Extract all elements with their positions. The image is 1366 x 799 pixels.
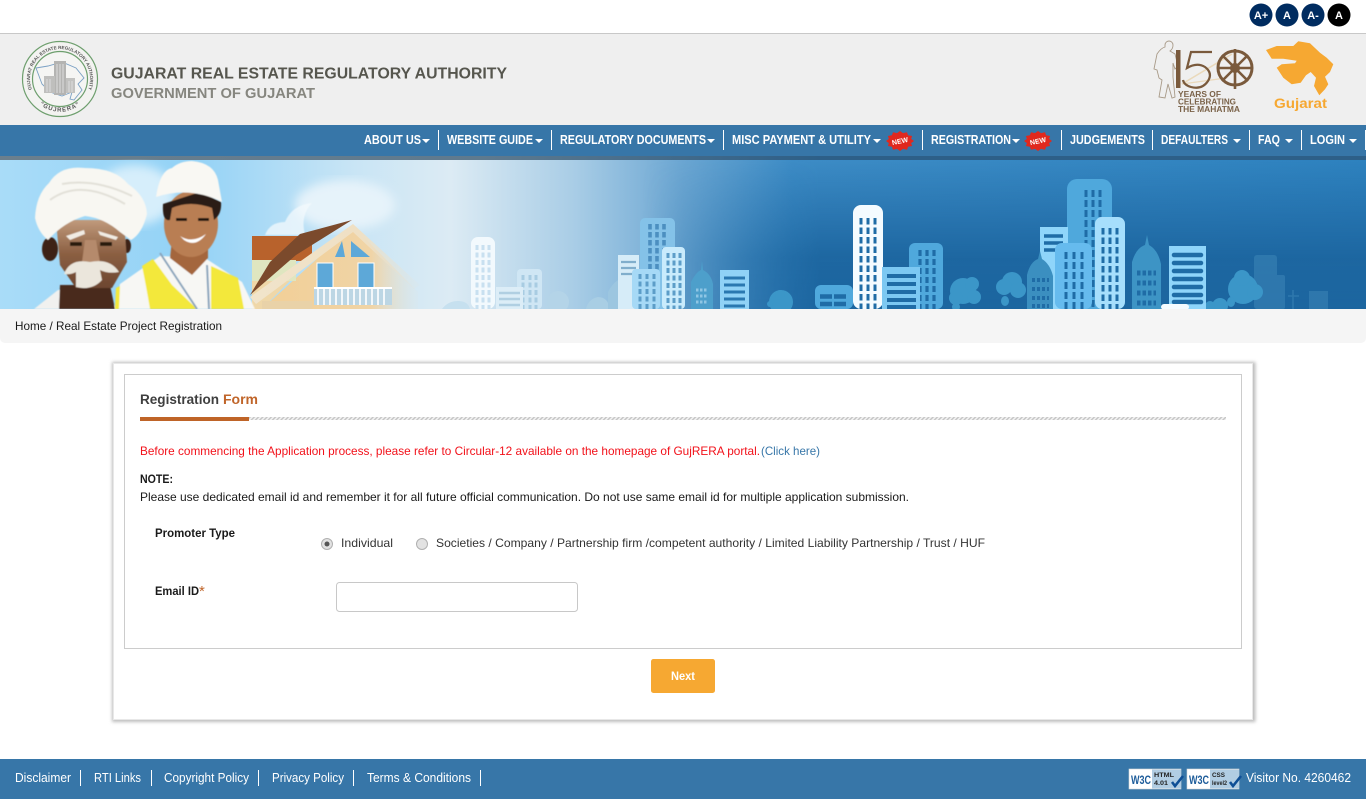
note text (140, 472, 909, 504)
font size controls: A (1283, 10, 1291, 22)
font size controls (1250, 4, 1350, 26)
heading: registration form: Registration (140, 392, 219, 407)
field: promoter type: Promoter Type (155, 526, 235, 540)
icon: GujRERA seal: "GUJRERA" (42, 102, 78, 112)
field: promoter type: Individual (341, 536, 393, 550)
navigation bar: DEFAULTERS (1161, 133, 1228, 147)
icon: W3C CSS badge (1187, 769, 1241, 789)
footer bar: RTI Links (94, 771, 141, 785)
footer bar: Terms & Conditions (367, 771, 471, 785)
notice text: Before commencing the Application process, please refer to Circular-12 available on the homepage of GujRERA portal. (140, 444, 760, 458)
note text: NOTE: (140, 472, 173, 486)
icon: pale skyline left (442, 218, 685, 313)
field: email id: * (199, 583, 205, 600)
title: authority name: GUJARAT REAL ESTATE REGULATORY AUTHORITY (111, 66, 507, 82)
icon: W3C HTML badge: HTML (1154, 772, 1174, 779)
title: authority name: GOVERNMENT OF GUJARAT (111, 86, 315, 102)
font size controls: A (1335, 10, 1343, 22)
navigation bar: MISC PAYMENT & UTILITY (732, 133, 872, 147)
breadcrumb bar (0, 309, 1366, 343)
navigation bar: REGULATORY DOCUMENTS (560, 133, 706, 147)
icon: 150 years of celebrating the Mahatma: CELEBRATING (1178, 98, 1236, 106)
icon: new badge 2: NEW (1029, 137, 1047, 147)
icon: Gujarat map logo: Gujarat (1274, 95, 1327, 111)
icon: new badge 1 (886, 131, 914, 151)
navigation bar: REGISTRATION (931, 133, 1011, 147)
icon: blue skyline right (691, 179, 1328, 314)
icon: faint far buildings (1254, 255, 1328, 309)
icon: 150 years of celebrating the Mahatma: THE MAHATMA (1178, 105, 1240, 114)
icon: new badge 2 (1024, 131, 1052, 151)
footer bar: Privacy Policy (272, 771, 345, 785)
icon: 150 years of celebrating the Mahatma: YEARS OF (1178, 90, 1221, 99)
button: next: Next (671, 671, 695, 683)
icon: GujRERA seal: GUJARAT REAL ESTATE REGULATORY AUTHORITY (26, 46, 94, 90)
banner illustration (0, 160, 1366, 314)
field: email id (155, 582, 578, 612)
icon: W3C HTML badge: W3C (1131, 773, 1151, 787)
icon: clouds (95, 165, 395, 235)
navigation bar: ABOUT US (364, 133, 421, 147)
icon: elderly man with turban (34, 168, 147, 309)
icon: Gujarat map logo (1266, 41, 1333, 111)
icon: W3C CSS badge: level2 (1212, 781, 1228, 787)
icon: construction worker (115, 161, 255, 309)
icon: W3C HTML badge (1129, 769, 1183, 789)
button: next (651, 659, 715, 693)
field: email id: Email ID (155, 584, 199, 598)
font size controls: A+ (1254, 10, 1268, 22)
icon: GujRERA seal (22, 40, 98, 118)
heading: registration form (140, 392, 1226, 421)
icon: new badge 1: NEW (891, 137, 909, 147)
footer bar: Disclaimer (15, 771, 71, 785)
navigation bar: LOGIN (1310, 133, 1345, 147)
icon: W3C HTML badge: 4.01 (1154, 780, 1168, 787)
navigation bar (0, 125, 1366, 160)
footer bar: Copyright Policy (164, 771, 250, 785)
header band (0, 33, 1366, 125)
font size controls: A- (1307, 10, 1319, 22)
icon: 150 years of celebrating the Mahatma (1154, 41, 1253, 114)
note text: Please use dedicated email id and remember it for all future official communication. Do not use same email id for multiple application submission. (140, 490, 909, 504)
navigation bar: JUDGEMENTS (1070, 133, 1145, 147)
title: authority name (111, 66, 507, 102)
notice text: (Click here) (761, 444, 820, 458)
footer bar (0, 759, 1366, 799)
icon: W3C CSS badge: CSS (1212, 772, 1226, 779)
heading: registration form: Form (223, 392, 258, 407)
breadcrumb bar: Home / Real Estate Project Registration (15, 319, 222, 333)
navigation bar: WEBSITE GUIDE (447, 133, 533, 147)
navigation bar: FAQ (1258, 133, 1280, 147)
icon: house (250, 220, 420, 309)
icon: W3C CSS badge: W3C (1189, 773, 1209, 787)
field: promoter type (155, 526, 985, 550)
field: promoter type: Societies / Company / Partnership firm /competent authority / Limited Liability Partnership / Trust / HUF (436, 536, 985, 550)
panel: registration card (112, 362, 1256, 722)
visitor counter: Visitor No. 4260462 (1246, 770, 1351, 785)
